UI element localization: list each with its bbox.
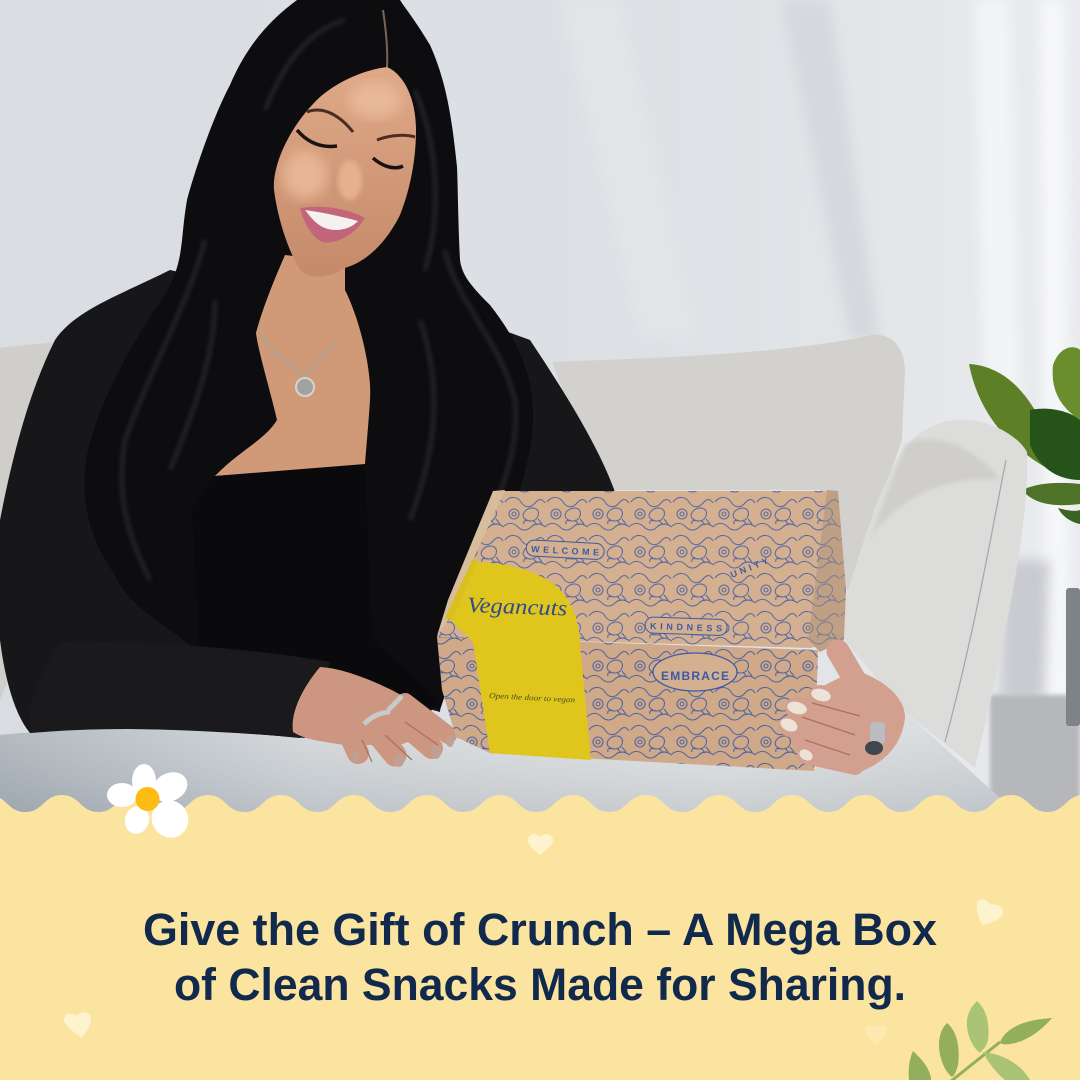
icon: heart right	[977, 899, 1003, 925]
kindness banner	[645, 617, 727, 636]
box front	[437, 637, 818, 771]
mailer box	[437, 490, 846, 771]
hair part	[383, 10, 387, 67]
face	[274, 67, 416, 277]
headline	[143, 904, 937, 1010]
yellow label	[452, 562, 591, 760]
icon: heart faint	[865, 1026, 887, 1045]
headline line 2: of Clean Snacks Made for Sharing.	[174, 959, 906, 1010]
photo background: curtain wall	[0, 0, 1080, 830]
headline line 1: Give the Gift of Crunch – A Mega Box	[143, 904, 937, 955]
icon: leaf sprig	[909, 1001, 1052, 1080]
embrace cloud	[653, 653, 737, 691]
embrace cloud: EMBRACE	[661, 669, 729, 683]
teeth	[305, 210, 358, 230]
back of hand	[785, 670, 905, 772]
kindness banner: KINDNESS	[650, 621, 722, 634]
left flap	[437, 490, 505, 636]
unity banner: UNITY	[729, 556, 770, 580]
nose highlight	[338, 160, 362, 200]
icon: heart top	[528, 834, 553, 855]
welcome banner	[526, 540, 605, 560]
fingers	[790, 696, 880, 766]
yellow wavy panel	[0, 795, 1080, 1080]
nails	[778, 687, 832, 763]
hair sheen	[122, 20, 516, 580]
left hand rings	[364, 696, 402, 724]
hair	[84, 0, 533, 710]
sweater sleeve	[29, 642, 330, 738]
right hand	[778, 651, 905, 772]
table top	[0, 712, 1030, 825]
cheek highlight	[283, 151, 327, 199]
yellow flap strip	[445, 558, 478, 622]
eyebrows	[307, 110, 415, 140]
plant pot	[1066, 588, 1080, 726]
neck and chest	[215, 255, 370, 476]
box tagline: Open the door to vegan	[489, 691, 575, 704]
ring	[865, 722, 885, 755]
right flap	[808, 490, 846, 652]
left hand nails	[352, 735, 454, 767]
black top	[192, 464, 440, 712]
floor	[990, 695, 1080, 820]
eyes	[297, 130, 403, 168]
sofa arm	[845, 420, 1027, 768]
box brand text: Vegancuts	[467, 592, 568, 620]
sofa back left	[0, 342, 60, 700]
plant leaves	[969, 347, 1080, 524]
finger separators	[802, 703, 860, 755]
box top	[437, 491, 843, 648]
woman	[0, 0, 615, 767]
lips	[300, 207, 365, 243]
sofa cushion	[552, 335, 905, 594]
icon: daisy flower	[107, 764, 196, 845]
welcome banner: WELCOME	[531, 544, 599, 558]
icon: heart left	[64, 1012, 91, 1038]
sweater	[0, 270, 615, 738]
thumb	[838, 651, 862, 692]
left hand	[293, 667, 454, 767]
left hand finger separators	[362, 722, 438, 762]
forehead highlight	[349, 82, 401, 118]
necklace	[258, 332, 338, 396]
